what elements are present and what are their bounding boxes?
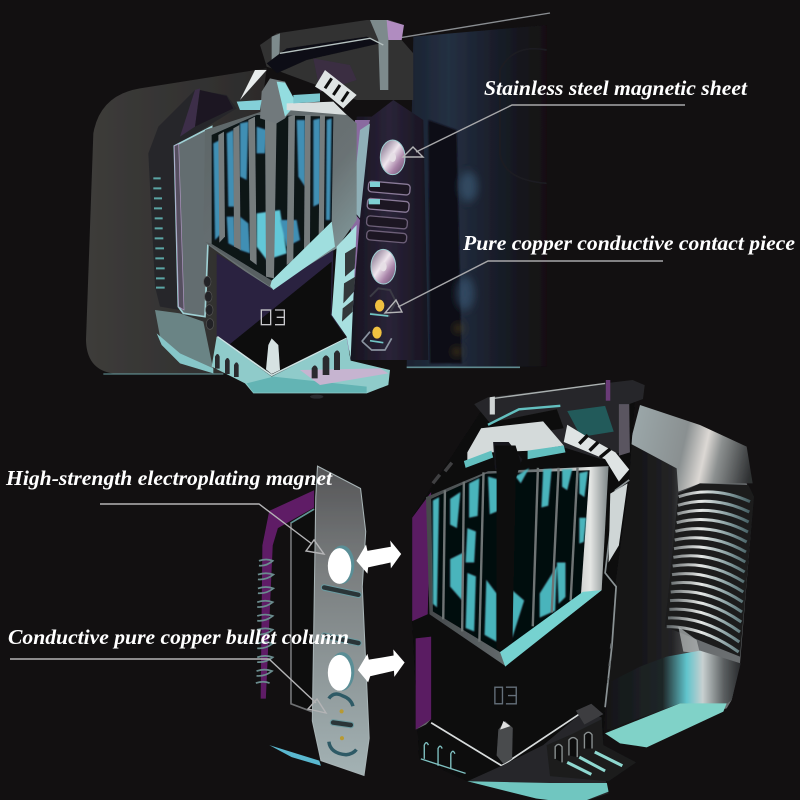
label: bullet column: Conductive pure copper bullet column <box>8 625 349 649</box>
plate slots <box>321 584 362 728</box>
light side panel <box>174 127 212 317</box>
bottom right cooler heatsink <box>605 405 754 747</box>
stainless magnetic button two <box>371 249 396 284</box>
purple rear arm <box>261 490 321 766</box>
spring coil <box>256 559 273 683</box>
lower display panel <box>217 250 347 376</box>
bottom left wedge <box>155 310 213 370</box>
left wing shell <box>148 90 237 310</box>
label: stainless steel magnetic sheet: Stainless steel magnetic sheet <box>484 76 748 100</box>
cyan right frame <box>332 225 357 358</box>
bottom cyan base <box>212 337 390 399</box>
bottom base <box>416 704 636 800</box>
leader line: bullet column <box>10 659 326 713</box>
left vent ribs <box>153 178 165 288</box>
upper magnet <box>328 545 354 584</box>
fan blades <box>213 118 332 260</box>
frame around fan grille <box>203 103 357 291</box>
leader line: pure copper contact piece <box>385 261 663 313</box>
top clamp <box>240 20 413 108</box>
digital number display <box>261 310 284 325</box>
side frame line <box>605 480 629 707</box>
plate <box>312 466 369 775</box>
bottom right cooler <box>412 380 645 800</box>
right vent dashes <box>608 643 611 683</box>
center pointer <box>497 721 513 764</box>
fan grille <box>431 445 590 656</box>
top metal band <box>630 405 753 492</box>
cyan grille lower edge <box>268 222 335 290</box>
grille bars <box>443 468 578 647</box>
center spine <box>237 78 347 123</box>
grille bars <box>218 115 325 278</box>
cyan heatsink base <box>605 703 727 747</box>
frame around fan grille <box>426 466 609 666</box>
left small vents <box>204 276 214 329</box>
main body <box>412 383 636 800</box>
copper bullets <box>340 709 344 740</box>
cyan grille lower edge <box>500 590 602 667</box>
right side panel <box>347 100 428 360</box>
lower magnet <box>328 652 354 691</box>
phone left back <box>86 68 267 374</box>
double arrow two <box>358 649 405 682</box>
double arrow one <box>356 541 401 574</box>
top cooler attached to phone <box>86 13 550 399</box>
magnetic plate module <box>256 466 405 775</box>
curved slots <box>329 694 356 755</box>
leader line: stainless steel magnetic sheet <box>403 105 685 157</box>
vent slots <box>366 181 410 243</box>
digital number display <box>495 687 516 704</box>
top clamp <box>464 380 645 482</box>
bottom left edge line <box>431 711 584 766</box>
copper contact pieces <box>362 288 396 350</box>
stainless magnetic button one <box>380 140 405 175</box>
lower metal band <box>607 651 741 730</box>
label: pure copper contact piece: Pure copper conductive contact piece <box>462 231 795 255</box>
fan grille <box>212 115 333 281</box>
rear dark body <box>607 433 753 737</box>
small top-left ridges <box>433 463 452 483</box>
label: electroplating magnet: High-strength electroplating magnet <box>5 466 333 490</box>
fan blades <box>433 468 588 642</box>
phone right side <box>397 13 550 367</box>
heatsink fins <box>665 483 754 657</box>
purple left edge <box>412 492 431 730</box>
leader line: electroplating magnet <box>100 504 324 554</box>
